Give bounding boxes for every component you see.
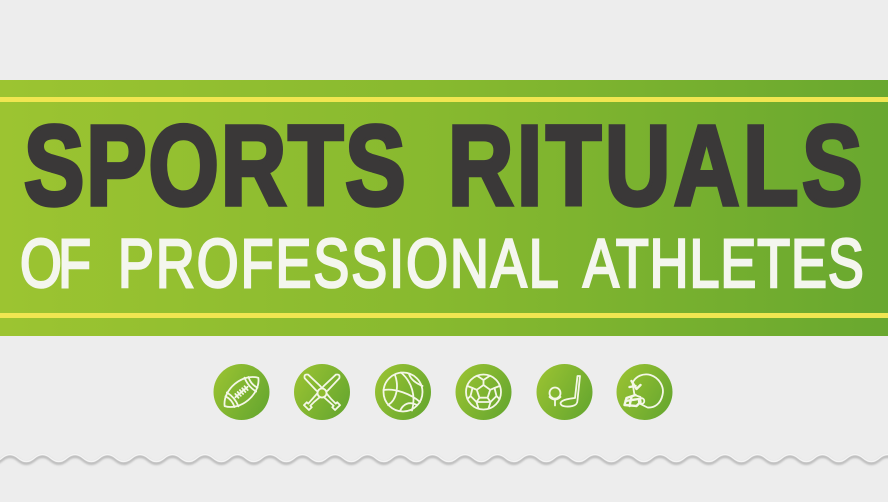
icon: basketball	[375, 364, 431, 420]
subtitle: PROFESSIONAL	[118, 226, 559, 303]
icon: soccer ball	[456, 364, 512, 420]
title: main heading: RITUALS	[448, 102, 862, 229]
subtitle: OF	[20, 226, 91, 303]
divider: wavy edge	[0, 454, 888, 464]
icon: crossed baseball bats	[294, 364, 350, 420]
title banner	[0, 80, 888, 336]
icon row	[214, 364, 672, 420]
subtitle: ATHLETES	[583, 226, 864, 303]
subtitle	[20, 226, 864, 303]
icon: baseball	[318, 388, 326, 398]
title: main heading	[24, 102, 862, 229]
icon: american football	[214, 364, 270, 420]
icon: football helmet	[616, 364, 672, 420]
icon: golf club and tee	[536, 364, 592, 420]
title: main heading: SPORTS	[24, 102, 406, 229]
